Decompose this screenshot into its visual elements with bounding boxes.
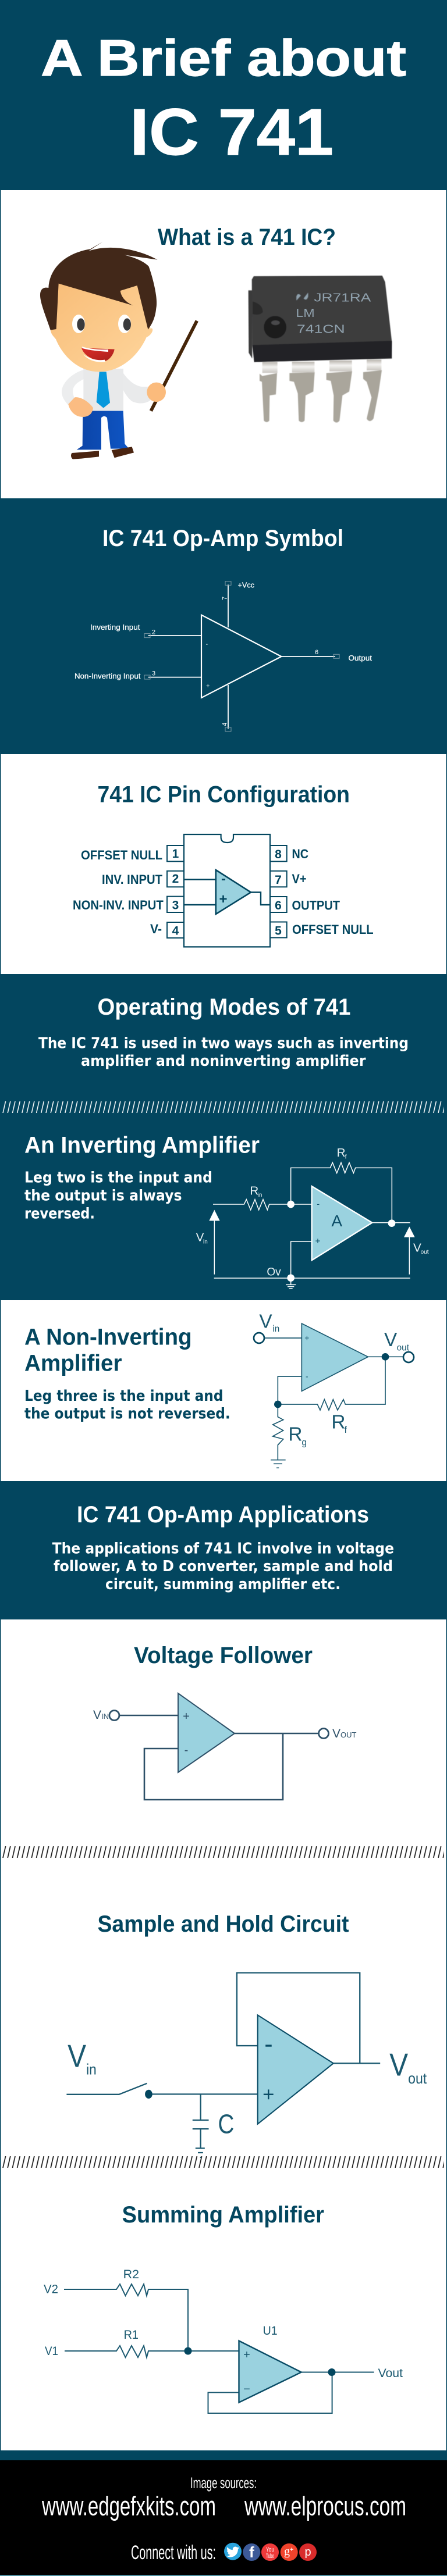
chip marking line 1: JR71RA	[314, 291, 371, 304]
diagram: 8-pin chip: NC	[292, 847, 308, 861]
diagram: op-amp symbol: -	[206, 641, 208, 648]
icon: pinterest: p	[304, 2546, 311, 2559]
diagram: voltage follower circuit: +	[183, 1710, 190, 1723]
diagram: op-amp symbol: Inverting Input	[90, 623, 140, 631]
panel: footer	[0, 2450, 447, 2576]
diagram: summing amplifier circuit: −	[243, 2383, 250, 2396]
diagram: sample and hold circuit: V	[389, 2046, 409, 2082]
diagram: summing amplifier circuit: +	[243, 2349, 250, 2361]
panel: pin configuration	[1, 754, 446, 974]
diagram: op-amp symbol: 4	[221, 723, 228, 726]
diagram: non-inverting amplifier circuit: f	[345, 1425, 347, 1435]
diagram: op-amp symbol: +	[206, 683, 210, 690]
diagram: inverting amplifier circuit: -	[317, 1200, 320, 1209]
heading: summing amplifier: Summing Amplifier	[122, 2202, 324, 2228]
diagram: inverting amplifier circuit: out	[421, 1249, 429, 1255]
text: inverting amplifier description: Leg two is the input and	[24, 1169, 212, 1187]
diagram: inverting amplifier circuit: +	[315, 1237, 321, 1247]
panel: application circuits	[1, 1619, 446, 2450]
diagram: op-amp symbol: Non-Inverting Input	[74, 672, 141, 680]
heading: op-amp symbol: IC 741 Op-Amp Symbol	[102, 526, 343, 551]
text: operating modes description	[38, 1034, 409, 1070]
diagram: non-inverting amplifier circuit	[254, 1311, 414, 1468]
diagram: 8-pin chip: OUTPUT	[292, 898, 340, 913]
diagram: non-inverting amplifier circuit: +	[304, 1333, 309, 1343]
text: non-inverting amplifier description: Leg three is the input and	[24, 1387, 224, 1405]
diagram: 8-pin chip: 1	[172, 847, 179, 861]
diagram: sample and hold circuit: in	[86, 2060, 97, 2078]
text: applications description: The applications of 741 IC involve in voltage	[52, 1540, 394, 1557]
diagram: inverting amplifier circuit: in	[203, 1239, 208, 1246]
diagram: voltage follower circuit: VIN	[93, 1708, 109, 1722]
diagram: op-amp symbol: 3	[152, 670, 155, 677]
diagram: inverting amplifier circuit: R	[250, 1184, 258, 1198]
text: website one: www.edgefxkits.com	[41, 2491, 216, 2521]
title line 1: A Brief about	[41, 29, 406, 87]
panel: non-inverting amplifier	[1, 1300, 446, 1481]
diagram: op-amp symbol: 7	[221, 597, 228, 600]
diagram: inverting amplifier circuit: A	[331, 1212, 342, 1230]
panel: title header	[0, 0, 447, 190]
icon: youtube: You	[266, 2546, 274, 2553]
text: applications description: follower, A to D converter, sample and hold	[54, 1558, 393, 1575]
diagram: inverting amplifier circuit: in	[258, 1192, 262, 1198]
heading: non-inverting amplifier: A Non-Inverting	[24, 1325, 192, 1350]
diagram: inverting amplifier circuit: Ov	[267, 1266, 281, 1278]
diagram: 8-pin chip: +	[219, 891, 228, 907]
diagram: voltage follower circuit: -	[185, 1744, 188, 1757]
icon: facebook	[243, 2543, 260, 2561]
diagram: op-amp symbol: 2	[152, 629, 155, 636]
text: non-inverting amplifier description: the output is not reversed.	[24, 1405, 230, 1422]
icon: google plus: +	[290, 2546, 293, 2553]
diagram: 8-pin chip: V+	[292, 872, 306, 886]
text: inverting amplifier description	[24, 1169, 212, 1223]
text: applications description: circuit, summing amplifier etc.	[105, 1576, 340, 1593]
text: operating modes description: The IC 741 is used in two ways such as inverting	[38, 1034, 409, 1052]
diagram: sample and hold circuit	[66, 1973, 427, 2157]
heading: inverting amplifier: An Inverting Amplifier	[24, 1133, 260, 1158]
diagram: voltage follower circuit: VOUT	[332, 1727, 357, 1740]
heading: applications: IC 741 Op-Amp Applications	[77, 1502, 369, 1528]
icon: google plus: g	[284, 2545, 290, 2558]
diagram: 8-pin chip: 3	[172, 899, 179, 912]
panel: operating modes	[0, 974, 447, 1099]
diagram: 8-pin chip	[73, 834, 374, 947]
panel: op-amp symbol	[0, 498, 447, 754]
text: connect with us: Connect with us:	[131, 2542, 216, 2564]
heading: sample and hold circuit: Sample and Hold Circuit	[98, 1911, 349, 1937]
diagram: non-inverting amplifier circuit: R	[288, 1423, 302, 1445]
diagram: non-inverting amplifier circuit: -	[306, 1372, 308, 1381]
diagram: inverting amplifier circuit: V	[196, 1230, 204, 1244]
illustration: cartoon teacher with pointer	[40, 242, 197, 459]
heading: what is a 741 IC: What is a 741 IC?	[158, 224, 336, 250]
icon: youtube: Tube	[266, 2553, 274, 2560]
icon: twitter	[224, 2543, 242, 2560]
diagram: 8-pin chip: NON-INV. INPUT	[73, 898, 164, 912]
diagram: inverting amplifier circuit: f	[345, 1154, 347, 1160]
diagram: non-inverting amplifier circuit: in	[272, 1324, 279, 1334]
diagram: 8-pin chip: 7	[275, 873, 282, 887]
diagram: op-amp symbol: Output	[348, 654, 372, 662]
heading: pin configuration: 741 IC Pin Configuration	[98, 782, 350, 807]
diagram: summing amplifier circuit: Vout	[378, 2367, 403, 2380]
text: inverting amplifier description: reversed.	[24, 1205, 95, 1223]
diagram: summing amplifier circuit: V2	[44, 2283, 58, 2296]
text: applications description	[52, 1540, 394, 1593]
title line 2: IC 741	[130, 95, 334, 169]
diagram: 8-pin chip: 2	[172, 872, 179, 886]
heading: operating modes: Operating Modes of 741	[98, 994, 350, 1020]
panel: what is a 741 IC	[1, 190, 446, 498]
diagram: non-inverting amplifier circuit: R	[331, 1412, 345, 1433]
text: operating modes description: amplifier and noninverting amplifier	[81, 1052, 366, 1070]
diagram: inverting amplifier circuit: R	[337, 1146, 346, 1159]
panel: applications	[0, 1481, 447, 1619]
diagram: op-amp symbol: 6	[315, 649, 318, 656]
text: non-inverting amplifier description	[24, 1387, 230, 1422]
text: inverting amplifier description: the output is always	[24, 1187, 182, 1205]
text: image sources label: Image sources:	[190, 2474, 257, 2492]
diagram: non-inverting amplifier circuit: g	[301, 1437, 307, 1447]
diagram: op-amp symbol	[74, 581, 372, 732]
diagram: voltage follower circuit	[93, 1693, 357, 1800]
diagram: summing amplifier circuit: R2	[123, 2268, 139, 2281]
diagram: 8-pin chip: 8	[275, 848, 282, 861]
diagram: 8-pin chip: V-	[150, 922, 162, 936]
panel: inverting amplifier	[24, 1133, 429, 1289]
diagram: 8-pin chip: -	[221, 871, 226, 887]
diagram: summing amplifier circuit	[44, 2268, 403, 2413]
chip marking line 2: LM	[296, 306, 315, 320]
photo: LM741CN chip	[249, 276, 392, 423]
heading: non-inverting amplifier: Amplifier	[24, 1350, 122, 1376]
heading: non-inverting amplifier	[24, 1325, 192, 1376]
diagram: 8-pin chip: OFFSET NULL	[81, 848, 162, 862]
diagram: sample and hold circuit: V	[68, 2038, 87, 2074]
heading: voltage follower: Voltage Follower	[134, 1643, 313, 1668]
diagram: non-inverting amplifier circuit: out	[397, 1343, 410, 1353]
chip marking line 3: 741CN	[297, 322, 345, 336]
diagram: op-amp symbol: +Vcc	[237, 581, 254, 590]
diagram: sample and hold circuit: C	[218, 2108, 234, 2139]
diagram: 8-pin chip: 6	[275, 899, 282, 912]
icon: google plus	[281, 2543, 298, 2561]
icon: facebook: f	[249, 2543, 254, 2561]
diagram: non-inverting amplifier circuit: V	[384, 1329, 398, 1351]
diagram: 8-pin chip: OFFSET NULL	[292, 922, 374, 937]
icon: pinterest	[299, 2543, 317, 2561]
diagram: summing amplifier circuit: R1	[124, 2328, 139, 2342]
icon: youtube	[261, 2543, 279, 2561]
diagram: 8-pin chip: 4	[172, 924, 179, 937]
diagram: summing amplifier circuit: V1	[45, 2345, 58, 2358]
diagram: inverting amplifier circuit	[196, 1146, 429, 1289]
diagram: sample and hold circuit: out	[408, 2070, 427, 2087]
diagram: inverting amplifier circuit: V	[413, 1241, 421, 1255]
diagram: non-inverting amplifier circuit: V	[259, 1311, 272, 1332]
diagram: 8-pin chip: 5	[275, 924, 282, 937]
diagram: summing amplifier circuit: U1	[263, 2324, 278, 2338]
diagram: 8-pin chip: INV. INPUT	[102, 872, 163, 887]
